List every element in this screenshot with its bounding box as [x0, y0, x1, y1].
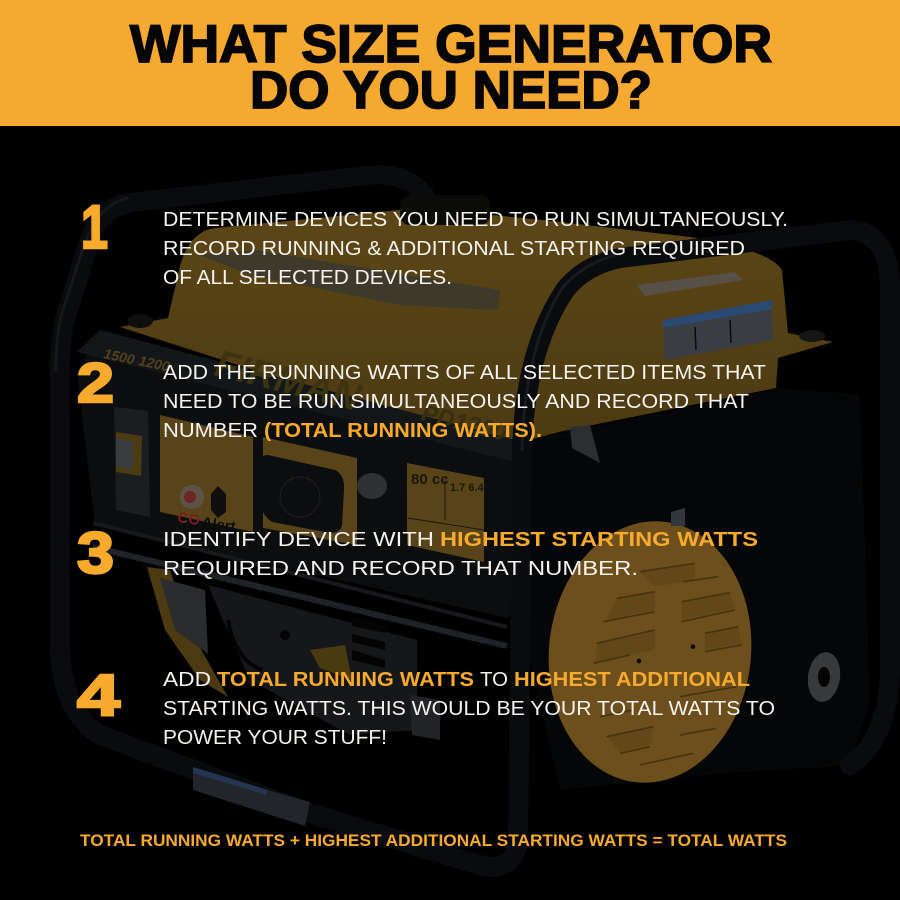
step 2 text: (TOTAL RUNNING WATTS). — [264, 419, 542, 442]
mounting bracket above cover — [671, 508, 685, 526]
step 4 text: TO — [480, 668, 508, 691]
number 4: 4 — [77, 663, 120, 728]
specs label: 80 cc — [411, 471, 449, 488]
number 2: 2 — [77, 351, 114, 414]
step 4 text: POWER YOUR STUFF! — [163, 726, 387, 749]
step 1 text: RECORD RUNNING & ADDITIONAL STARTING REQUIRED — [163, 237, 745, 260]
bolts — [799, 330, 825, 342]
fuel tank — [120, 208, 833, 445]
knob — [357, 473, 387, 499]
round end cover — [536, 511, 764, 793]
step 4 text — [163, 668, 775, 749]
formula: TOTAL RUNNING WATTS + HIGHEST ADDITIONAL STARTING WATTS = TOTAL WATTS — [80, 832, 787, 850]
step 1 text: DETERMINE DEVICES YOU NEED TO RUN SIMULTANEOUSLY. — [163, 208, 788, 231]
number 1: 1 — [81, 193, 108, 261]
step 4 text: HIGHEST ADDITIONAL — [514, 668, 750, 691]
panel lettering: PD1200 — [419, 400, 510, 447]
lower tank strip and label — [147, 567, 228, 697]
step 3 text: HIGHEST STARTING WATTS — [440, 528, 758, 551]
frame tubes — [56, 198, 890, 867]
warning label — [663, 300, 773, 360]
number 3: 3 — [77, 521, 114, 586]
switch panel — [114, 407, 150, 517]
step 1 text — [163, 208, 788, 289]
step 4 text: TOTAL RUNNING WATTS — [217, 668, 474, 691]
panel lettering: FIRMAN — [211, 343, 366, 420]
rear engine block — [525, 388, 870, 790]
step 3 text — [163, 528, 758, 580]
title: WHAT SIZE GENERATOR — [130, 15, 772, 74]
step 2 text: ADD THE RUNNING WATTS OF ALL SELECTED ITEMS THAT — [163, 361, 766, 384]
rear frame rail — [127, 175, 428, 203]
tank cap — [400, 195, 490, 225]
step 2 text: NEED TO BE RUN SIMULTANEOUSLY AND RECORD THAT — [163, 390, 749, 413]
step 3 — [77, 521, 758, 586]
panel lettering — [102, 343, 510, 447]
step 2 text — [163, 361, 766, 442]
yellow CO label: Alert — [200, 514, 237, 536]
step 3 text: REQUIRED AND RECORD THAT NUMBER. — [163, 557, 638, 580]
specs label — [407, 463, 485, 562]
specs label: 1.7 6.4 — [450, 482, 485, 494]
tank rear sticker — [637, 272, 743, 296]
yellow CO label — [160, 415, 253, 536]
step 2 text: NUMBER — [163, 419, 258, 442]
title: DO YOU NEED? — [250, 61, 652, 120]
step 1 text: OF ALL SELECTED DEVICES. — [163, 266, 452, 289]
engine shroud — [208, 585, 440, 740]
step 4 — [77, 663, 775, 749]
step 3 text: IDENTIFY DEVICE WITH — [163, 528, 434, 551]
engine gasket — [805, 650, 843, 704]
title banner — [0, 0, 900, 126]
step 1 — [81, 193, 788, 289]
tank control strip — [200, 250, 500, 310]
step 4 text: STARTING WATTS. THIS WOULD BE YOUR TOTAL WATTS TO — [163, 697, 775, 720]
panel lettering: 1200 — [137, 352, 171, 374]
step 2 — [77, 351, 766, 442]
outlet — [260, 437, 357, 545]
frame sticker — [193, 767, 310, 826]
control panel — [77, 330, 517, 620]
step 4 text: ADD — [163, 668, 211, 691]
yellow CO label: CO — [176, 509, 201, 529]
panel lettering: 1500 — [102, 345, 136, 367]
generator background image — [56, 175, 890, 867]
panel rails — [93, 523, 507, 627]
title — [130, 15, 772, 120]
